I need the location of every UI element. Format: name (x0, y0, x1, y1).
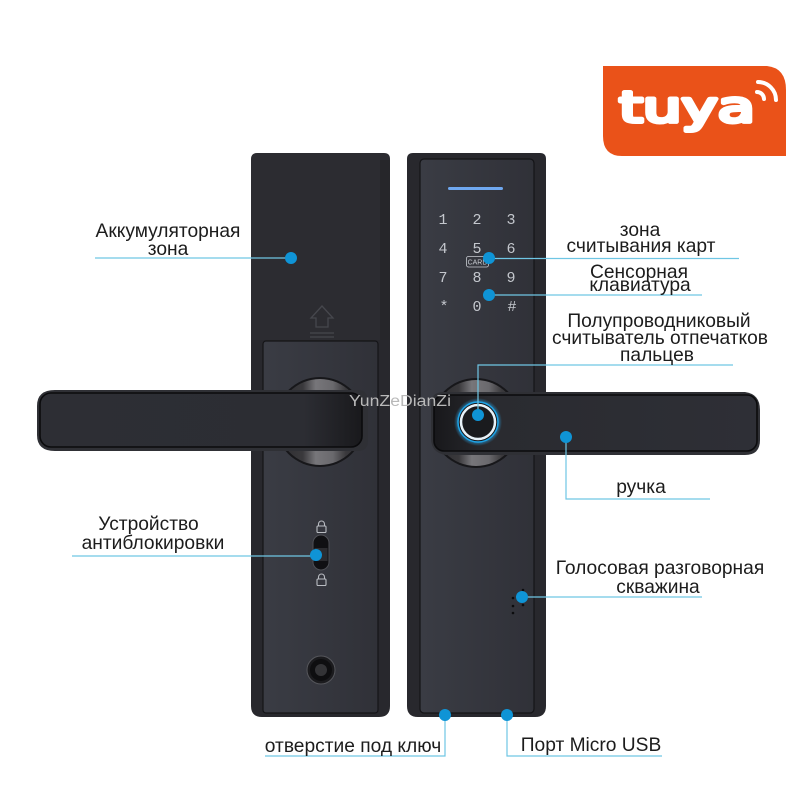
callout: voice hole: Голосовая разговорная (556, 558, 764, 579)
callout: fingerprint reader (472, 311, 768, 421)
anti-lock slider (313, 535, 329, 570)
keypad digits (438, 212, 517, 316)
keypad digits: * (439, 299, 449, 316)
keypad digits: 8 (472, 270, 482, 287)
callout: card reading zone: зона (620, 220, 661, 241)
callout: touch keypad: Сенсорная (590, 262, 688, 283)
callout: voice hole: скважина (616, 577, 700, 598)
tuya logo: tuya (619, 83, 755, 133)
callout: key hole: отверстие под ключ (265, 736, 441, 757)
keypad digits: 4 (438, 241, 448, 258)
keypad digits: 3 (506, 212, 516, 229)
callout: touch keypad (483, 262, 702, 301)
keypad digits: 1 (438, 212, 448, 229)
callout: card reading zone: считывания карт (567, 236, 716, 257)
right rosette (431, 378, 521, 468)
keypad digits: 2 (472, 212, 482, 229)
callout: anti-lock device (72, 514, 322, 561)
callout: fingerprint reader: Полупроводниковый (567, 311, 751, 332)
fingerprint reader (454, 398, 502, 446)
watermark: YunZeDianZi (349, 393, 451, 410)
speaker holes (512, 589, 524, 614)
callout: fingerprint reader: считыватель отпечатков (552, 328, 768, 349)
icon: unlocked padlock (317, 521, 326, 532)
right handle (431, 392, 760, 455)
battery cover (251, 153, 390, 345)
keypad digits: 7 (438, 270, 448, 287)
keypad digits: 9 (506, 270, 516, 287)
callout: battery zone: зона (148, 239, 189, 260)
callout: card reading zone (483, 220, 739, 264)
callout: battery zone: Аккумуляторная (96, 221, 240, 242)
callout: anti-lock device: антиблокировки (82, 533, 224, 554)
keypad digits: 5 (472, 241, 482, 258)
callout: handle: ручка (616, 477, 666, 498)
keypad digits: 6 (506, 241, 516, 258)
left rosette (275, 377, 365, 467)
CARD label: CARD (468, 260, 487, 266)
callout: key hole (265, 709, 451, 757)
callout: voice hole (516, 558, 764, 603)
callout: micro USB (501, 709, 662, 756)
callout: micro USB: Порт Micro USB (521, 735, 661, 756)
callout: touch keypad: клавиатура (589, 275, 691, 296)
brushed inner panel (263, 341, 378, 713)
lower plate (251, 340, 390, 717)
keypad digits: # (507, 299, 517, 316)
callout: fingerprint reader: пальцев (620, 345, 694, 366)
keypad digits: 0 (472, 299, 482, 316)
callout: battery zone (95, 221, 297, 264)
icon: upward arrow (310, 306, 334, 337)
right lock body (407, 153, 546, 717)
left lock body (251, 153, 390, 717)
callout: anti-lock device: Устройство (98, 514, 199, 535)
brushed front panel (420, 159, 534, 713)
left handle (37, 390, 368, 451)
callout: handle (560, 431, 710, 499)
CARD label (466, 256, 488, 267)
tuya logo (603, 66, 786, 156)
LED indicator bar (448, 187, 503, 190)
icon: locked padlock (317, 574, 326, 586)
key hole (307, 656, 335, 684)
